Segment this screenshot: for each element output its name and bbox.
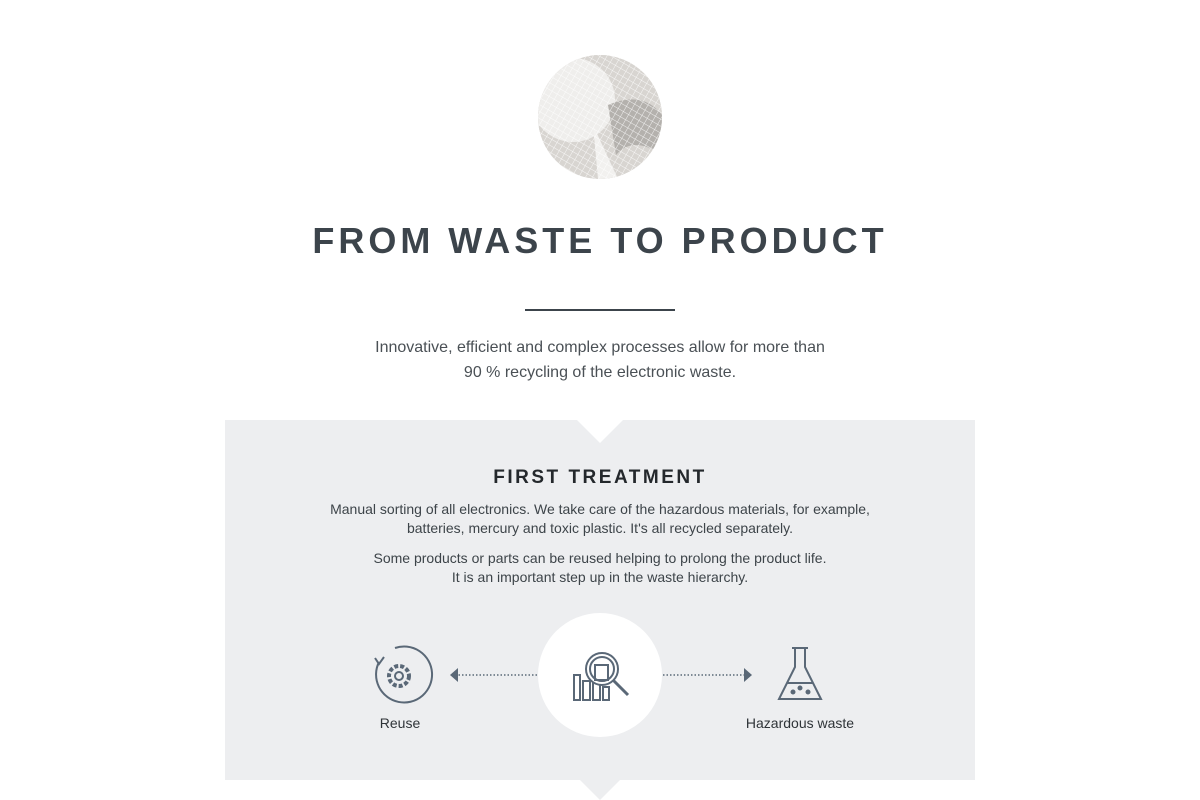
- intro text: 90 % recycling of the electronic waste.: [464, 364, 736, 381]
- arrow: right: [663, 668, 752, 682]
- panel: first treatment: [225, 420, 975, 780]
- label hazardous: Hazardous waste: [746, 715, 854, 731]
- notch bottom: [580, 780, 620, 800]
- photo circle: [538, 55, 662, 179]
- text block: batteries, mercury and toxic plastic. It's all recycled separately. Some products or parts can be reused helping to prolong the product life.: [374, 520, 826, 566]
- icon: analysis center: [538, 613, 662, 737]
- text block: It is an important step up in the waste hierarchy.: [452, 569, 748, 585]
- icon: hazardous waste: [746, 647, 854, 731]
- heading: FIRST TREATMENT: [493, 467, 707, 488]
- text block: Manual sorting of all electronics. We take care of the hazardous materials, for example,: [330, 501, 870, 517]
- notch top: [577, 420, 623, 443]
- icon: reuse: [374, 646, 434, 731]
- text block: [330, 501, 870, 585]
- arrow: left: [450, 668, 537, 682]
- label reuse: Reuse: [380, 715, 420, 731]
- intro text: Innovative, efficient and complex processes allow for more than: [375, 339, 825, 356]
- intro text: [375, 339, 825, 381]
- title: FROM WASTE TO PRODUCT: [312, 220, 888, 261]
